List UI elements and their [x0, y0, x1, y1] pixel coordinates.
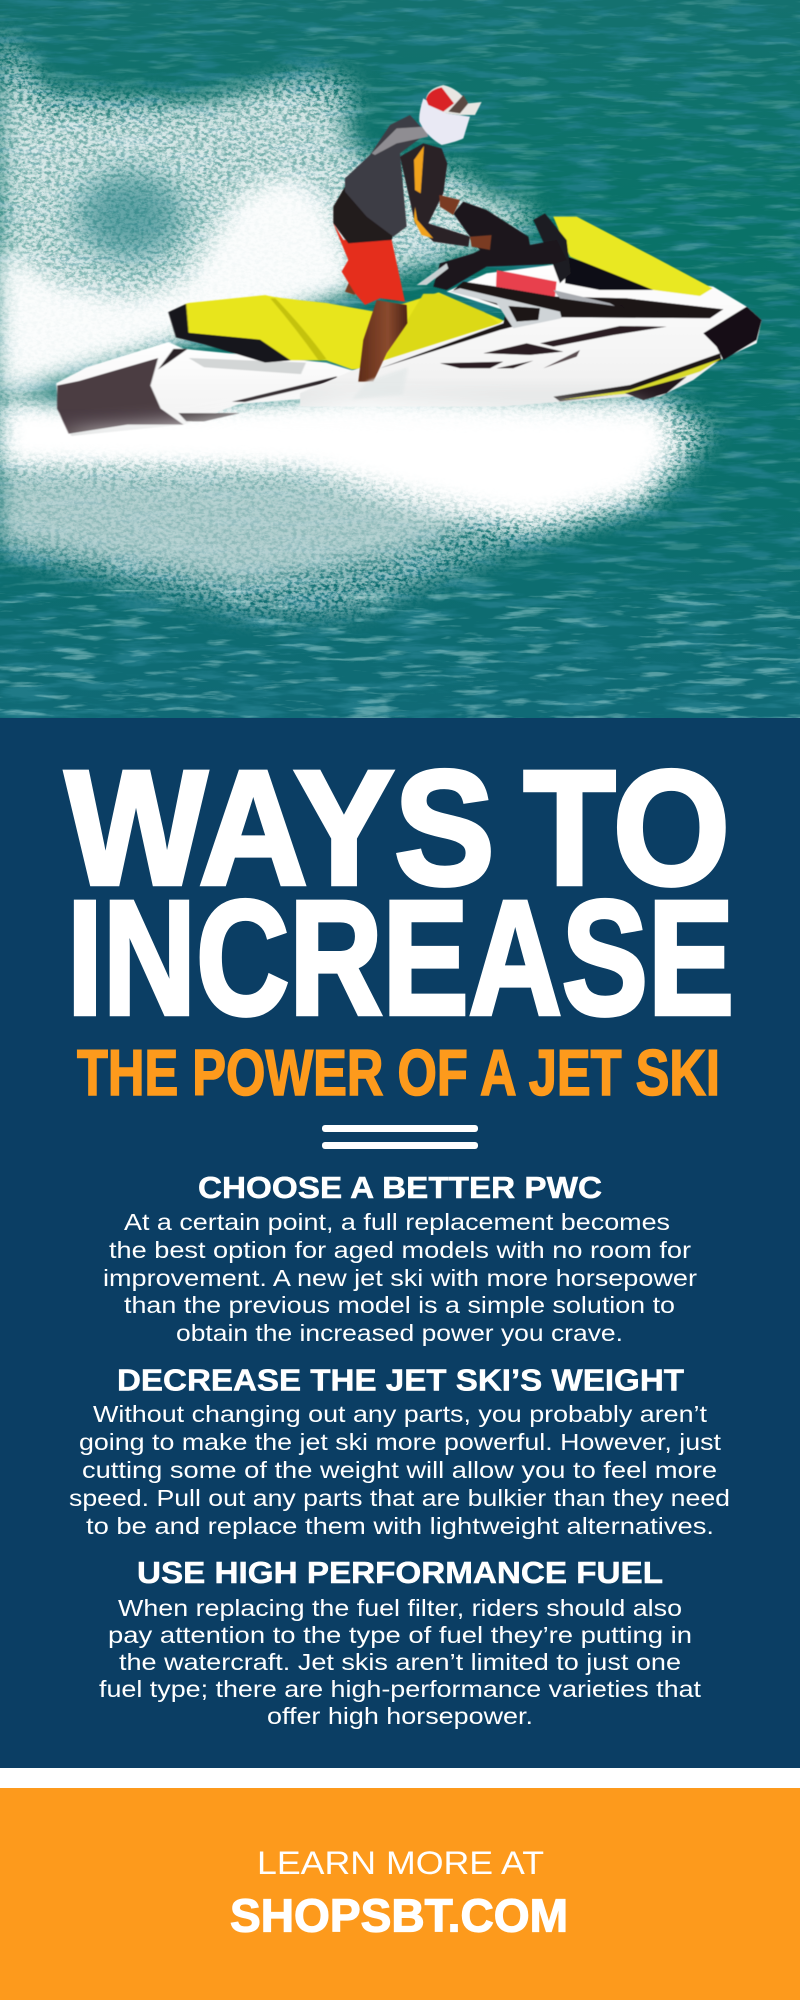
body text: Without changing out any parts, you probably aren’t: [93, 1401, 708, 1427]
body text: offer high horsepower.: [267, 1703, 533, 1729]
body text: the watercraft. Jet skis aren’t limited to just one: [119, 1649, 681, 1675]
body text: to be and replace them with lightweight alternatives.: [86, 1513, 714, 1539]
body text: [69, 1401, 730, 1539]
body text: At a certain point, a full replacement becomes: [124, 1209, 670, 1235]
rider: far leg: [344, 282, 356, 296]
body text: improvement. A new jet ski with more horsepower: [103, 1265, 697, 1291]
body text: [103, 1209, 697, 1346]
heading: CHOOSE A BETTER PWC: [198, 1171, 602, 1205]
orange footer panel: [0, 1788, 800, 2000]
rider: orange stripe: [414, 146, 433, 238]
photo foam over hull: [64, 369, 662, 434]
body text: going to make the jet ski more powerful. However, just: [79, 1429, 722, 1455]
jet ski rear: hull and seat: [56, 292, 505, 436]
navy content panel: [0, 718, 800, 1768]
rider: white face mask: [419, 98, 470, 145]
rider: vest strap: [372, 127, 428, 155]
footer: learn more at: LEARN MORE AT: [257, 1845, 544, 1881]
footer: website: SHOPSBT.COM: [230, 1890, 568, 1942]
body text: cutting some of the weight will allow you to feel more: [82, 1457, 717, 1483]
water background: [0, 0, 800, 718]
rider: black shirt: [333, 187, 400, 243]
photo: jet ski rider on water: [0, 0, 800, 718]
section: decrease the jet ski's weight: [69, 1364, 730, 1539]
section: use high performance fuel: [99, 1556, 702, 1729]
title: ways to increase: WAYS TO: [65, 736, 730, 919]
spray and wake: [0, 28, 711, 615]
rider: red and white cap: [426, 85, 482, 115]
body text: fuel type; there are high-performance varieties that: [99, 1676, 702, 1702]
heading: DECREASE THE JET SKI’S WEIGHT: [117, 1364, 684, 1398]
body text: speed. Pull out any parts that are bulkier than they need: [69, 1485, 730, 1511]
section: choose a better pwc: [103, 1171, 697, 1346]
double line divider: [322, 1125, 478, 1149]
rider: red shorts: [333, 223, 405, 305]
body text: the best option for aged models with no room for: [109, 1237, 691, 1263]
rider: sleeve: [400, 143, 470, 247]
body text: than the previous model is a simple solution to: [124, 1292, 675, 1318]
title: ways to increase: [65, 736, 734, 1049]
jet ski front: deck and hood: [300, 202, 762, 407]
rider: forearm and hand: [439, 195, 492, 250]
heading: USE HIGH PERFORMANCE FUEL: [137, 1556, 663, 1590]
body text: When replacing the fuel filter, riders should also: [118, 1595, 682, 1621]
body text: obtain the increased power you crave.: [176, 1320, 623, 1346]
rider: life vest: [345, 115, 427, 237]
body text: pay attention to the type of fuel they’re putting in: [108, 1622, 692, 1648]
rider: near leg: [358, 300, 407, 382]
body text: [99, 1595, 702, 1729]
rider: [333, 85, 492, 382]
white separator band: [0, 1768, 800, 1788]
